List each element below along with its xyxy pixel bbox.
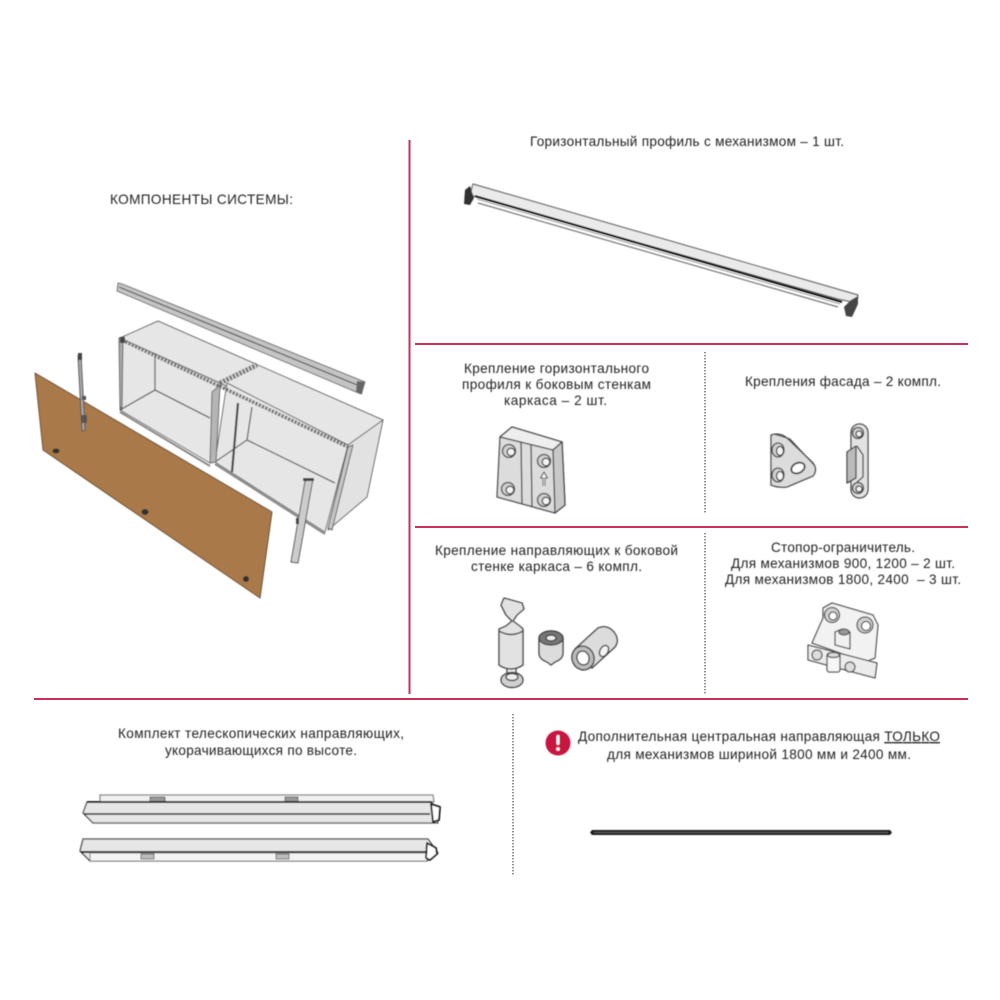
note: additional central guide: Дополнительная центральная направляющая ТОЛЬКО (578, 729, 940, 744)
caption: profile mount (462, 361, 651, 408)
caption: guide mounts: стенке каркаса – 6 компл. (471, 559, 642, 574)
caption: guide mounts (435, 543, 678, 574)
assembly illustration: cabinet with lift mechanism (35, 283, 383, 598)
icon: warning exclamation (546, 730, 570, 756)
caption: stopper: Для механизмов 1800, 2400 – 3 шт. (725, 572, 961, 587)
caption: guide mounts: Крепление направляющих к боковой (435, 543, 678, 558)
caption: facade mounts: Крепления фасада – 2 компл. (745, 374, 941, 389)
caption: stopper (725, 540, 961, 587)
caption: stopper: Стопор-ограничитель. (771, 540, 915, 555)
caption: telescopic guides: Комплект телескопических направляющих, (118, 726, 404, 741)
icon: facade latch strip (847, 424, 868, 498)
central guide rail (590, 830, 892, 835)
heading: system components: КОМПОНЕНТЫ СИСТЕМЫ: (110, 192, 293, 207)
caption: profile mount: каркаса – 2 шт. (504, 393, 607, 408)
icon: guide bolt (499, 598, 524, 688)
telescopic guide lower (80, 839, 438, 861)
icon: guide sleeve (569, 627, 617, 673)
cabinet body (119, 321, 383, 534)
caption: telescopic guides (118, 726, 404, 758)
caption: telescopic guides: укорачивающихся по высоте. (165, 743, 357, 758)
facade panel (35, 373, 272, 598)
caption: profile mount: профиля к боковым стенкам (462, 377, 651, 392)
horizontal profile rail (464, 184, 858, 317)
icon: profile mount bracket (497, 427, 565, 513)
left telescopic guide (78, 353, 87, 431)
icon: guide nut (539, 631, 563, 665)
caption: profile mount: Крепление горизонтального (464, 361, 649, 376)
note: additional central guide: для механизмов шириной 1800 мм и 2400 мм. (607, 747, 911, 762)
telescopic guide upper (83, 795, 440, 823)
caption: horizontal profile: Горизонтальный профиль с механизмом – 1 шт. (530, 134, 844, 149)
top profile rail (117, 283, 365, 394)
icon: stopper bracket (808, 603, 878, 678)
caption: stopper: Для механизмов 900, 1200 – 2 шт. (731, 556, 955, 571)
note: additional central guide (578, 729, 940, 762)
right telescopic guide (291, 478, 314, 563)
icon: facade plate (771, 434, 816, 487)
